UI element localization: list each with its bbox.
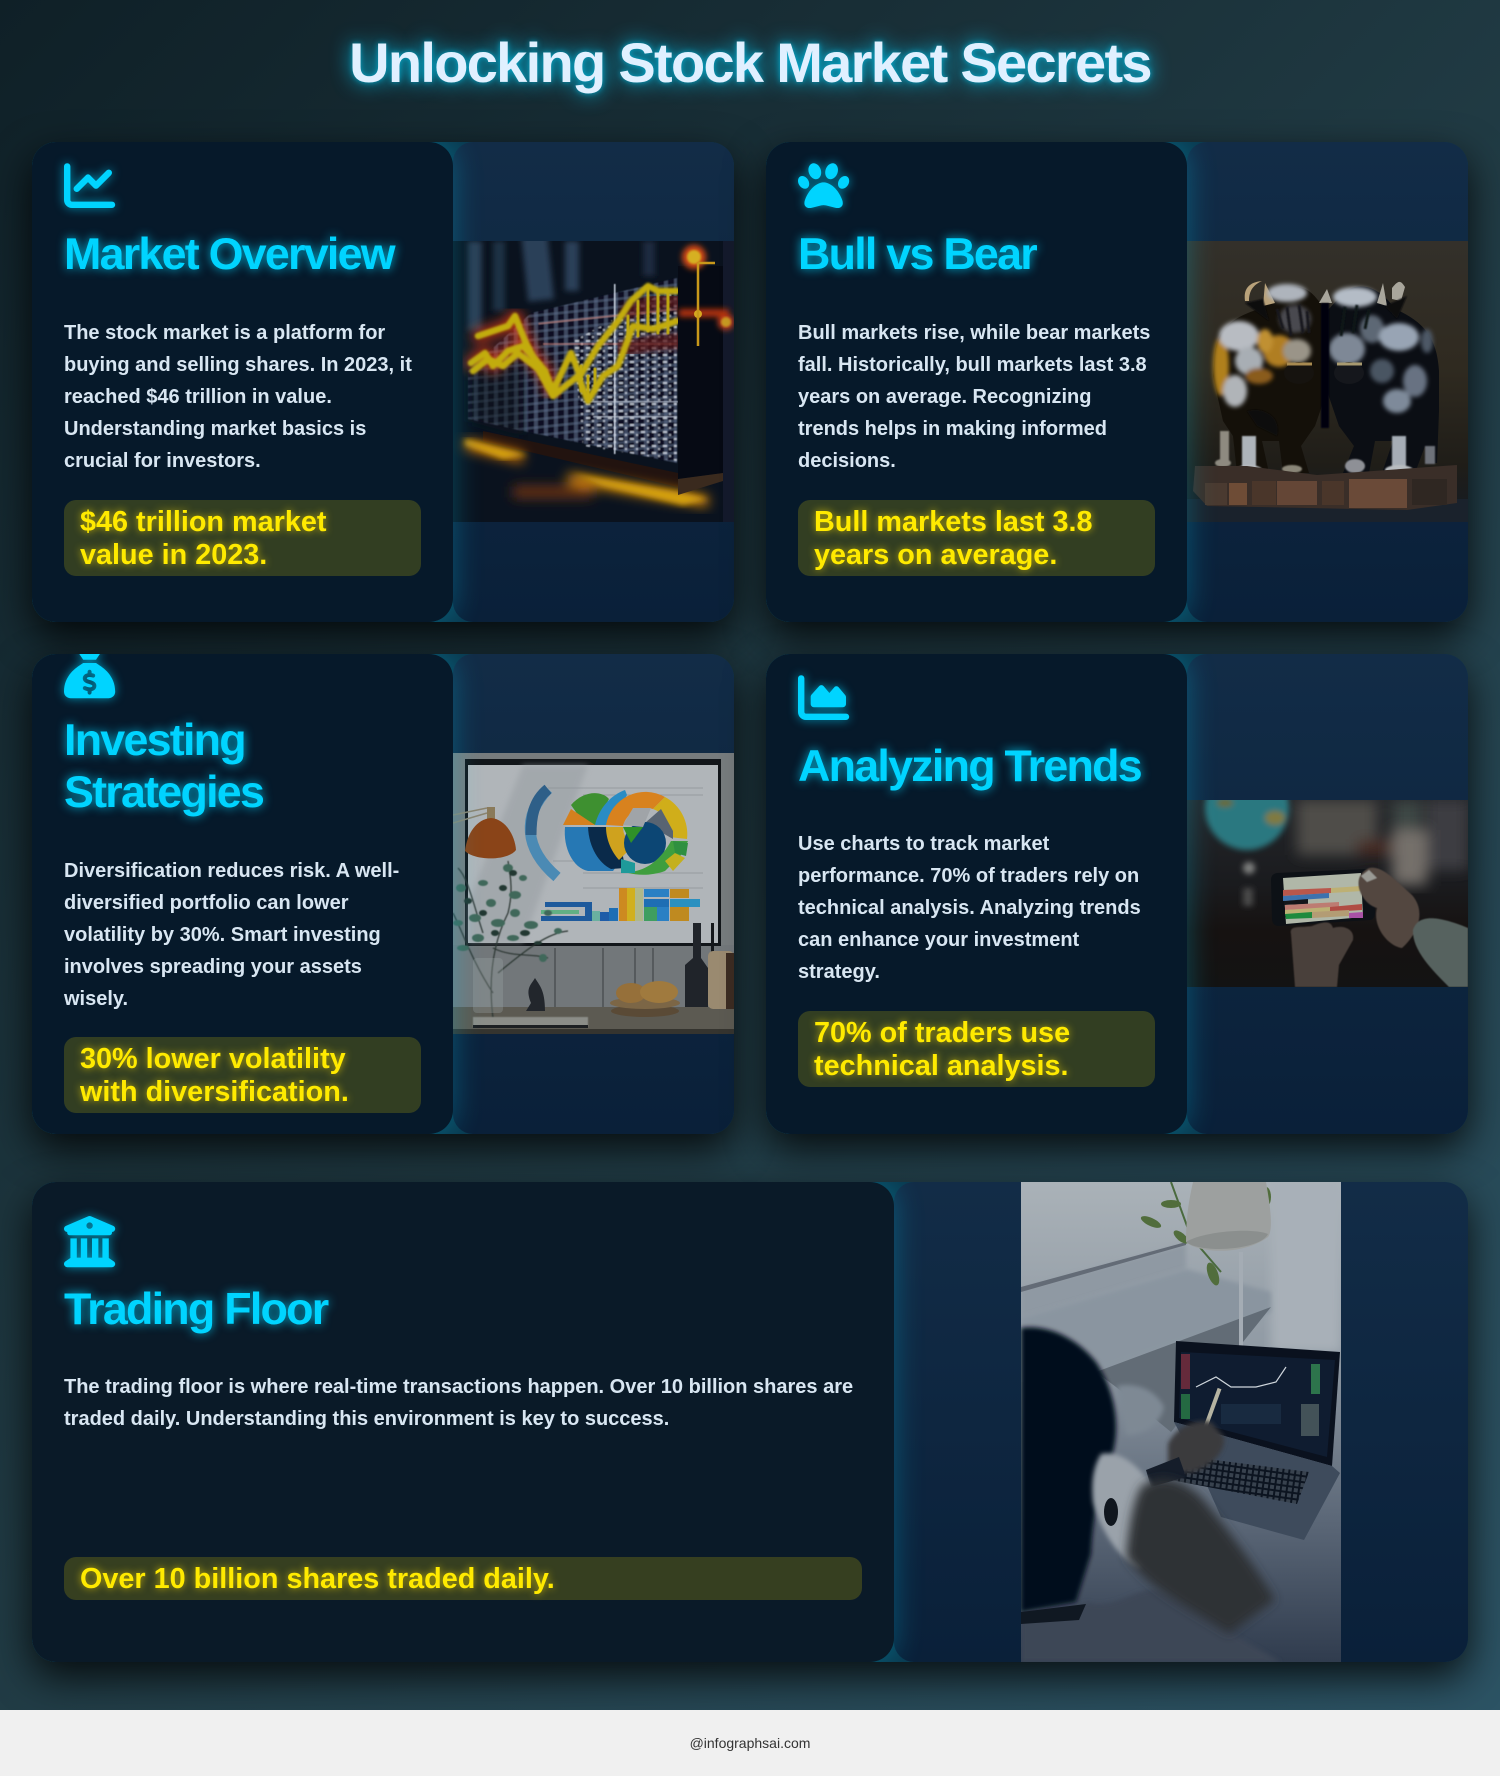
heading <box>59 715 270 824</box>
body text: involves spreading your assets <box>64 956 362 978</box>
callout: Bull markets last 3.8 <box>814 506 1093 538</box>
panel: investing strategies <box>32 654 734 1134</box>
callout <box>64 1557 862 1600</box>
heading: Trading Floor <box>64 1284 327 1334</box>
callout <box>798 500 1155 576</box>
callout <box>64 1037 421 1113</box>
body text: The stock market is a platform for <box>64 322 385 344</box>
callout: Over 10 billion shares traded daily. <box>80 1562 555 1594</box>
text panel <box>766 654 1187 1134</box>
image panel: bull statues <box>1187 142 1468 622</box>
arc <box>530 789 557 877</box>
icon: chart line <box>56 158 120 216</box>
body text: crucial for investors. <box>64 450 261 472</box>
lamp <box>453 807 516 858</box>
callout: technical analysis. <box>814 1050 1069 1082</box>
image panel: charts poster <box>453 654 734 1134</box>
image panel: market chart screen <box>453 142 734 622</box>
text panel <box>32 1182 894 1662</box>
body text: technical analysis. Analyzing trends <box>798 897 1141 919</box>
plant <box>453 861 568 1018</box>
body text: years on average. Recognizing <box>798 386 1091 408</box>
body text: The trading floor is where real-time transactions happen. Over 10 billion shares are <box>64 1376 853 1398</box>
plant and lamp <box>1139 1182 1271 1352</box>
body text: performance. 70% of traders rely on <box>798 865 1139 887</box>
body text: reached $46 trillion in value. <box>64 386 332 408</box>
right bull <box>1319 282 1439 475</box>
body text: Use charts to track market <box>798 833 1049 855</box>
body text: wisely. <box>64 988 128 1010</box>
body text: Bull markets rise, while bear markets <box>798 322 1150 344</box>
body text <box>798 833 1141 983</box>
body text: volatility by 30%. Smart investing <box>64 924 381 946</box>
callout <box>64 500 421 576</box>
hands <box>1291 868 1468 987</box>
body text: fall. Historically, bull markets last 3.8 <box>798 354 1147 376</box>
body text: Understanding market basics is <box>64 418 366 440</box>
body text: decisions. <box>798 450 896 472</box>
icon: paw <box>792 158 855 214</box>
footer: @infographsai.com <box>690 1735 810 1751</box>
panel: bull vs bear <box>766 142 1468 622</box>
callout: years on average. <box>814 539 1057 571</box>
phone <box>1271 869 1375 926</box>
body text: diversified portfolio can lower <box>64 892 348 914</box>
title: Unlocking Stock Market Secrets <box>349 31 1151 94</box>
heading: Strategies <box>64 766 263 816</box>
bar chart <box>541 888 700 921</box>
body text: trends helps in making informed <box>798 418 1107 440</box>
callout: 70% of traders use <box>814 1016 1070 1048</box>
body text: strategy. <box>798 961 880 983</box>
bread plate <box>610 981 680 1017</box>
panel: market overview <box>32 142 734 622</box>
callout <box>798 1011 1155 1087</box>
heading: Market Overview <box>64 229 394 279</box>
text panel <box>32 142 453 622</box>
laptop <box>1171 1341 1340 1540</box>
stone base <box>1193 465 1457 510</box>
body text <box>64 322 412 472</box>
callout: with diversification. <box>80 1076 349 1108</box>
icon: money bag <box>58 654 122 706</box>
person <box>1021 1327 1281 1662</box>
vase and bottles <box>473 958 503 1013</box>
icon: area chart <box>790 670 854 728</box>
text panel <box>766 142 1187 622</box>
callout: value in 2023. <box>80 539 267 571</box>
left bull <box>1213 281 1327 475</box>
callout: $46 trillion market <box>80 506 326 538</box>
panel: analyzing trends <box>766 654 1468 1134</box>
body text: Diversification reduces risk. A well- <box>64 860 399 882</box>
heading: Investing <box>64 715 245 765</box>
body text: traded daily. Understanding this environment is key to success. <box>64 1408 669 1430</box>
body text <box>798 322 1150 472</box>
body text: buying and selling shares. In 2023, it <box>64 354 412 376</box>
body text <box>64 860 399 1010</box>
text panel <box>32 654 453 1134</box>
icon: bank building <box>59 1210 120 1274</box>
panel: trading floor <box>32 1182 1468 1662</box>
donut charts <box>571 793 609 825</box>
body text: can enhance your investment <box>798 929 1079 951</box>
image panel: phone with chart <box>1187 654 1468 1134</box>
image panel: trader at laptop <box>894 1182 1468 1662</box>
heading: Analyzing Trends <box>798 741 1141 791</box>
footer <box>0 1710 1500 1765</box>
callout: 30% lower volatility <box>80 1042 346 1074</box>
body text <box>64 1376 853 1430</box>
heading: Bull vs Bear <box>798 229 1036 279</box>
